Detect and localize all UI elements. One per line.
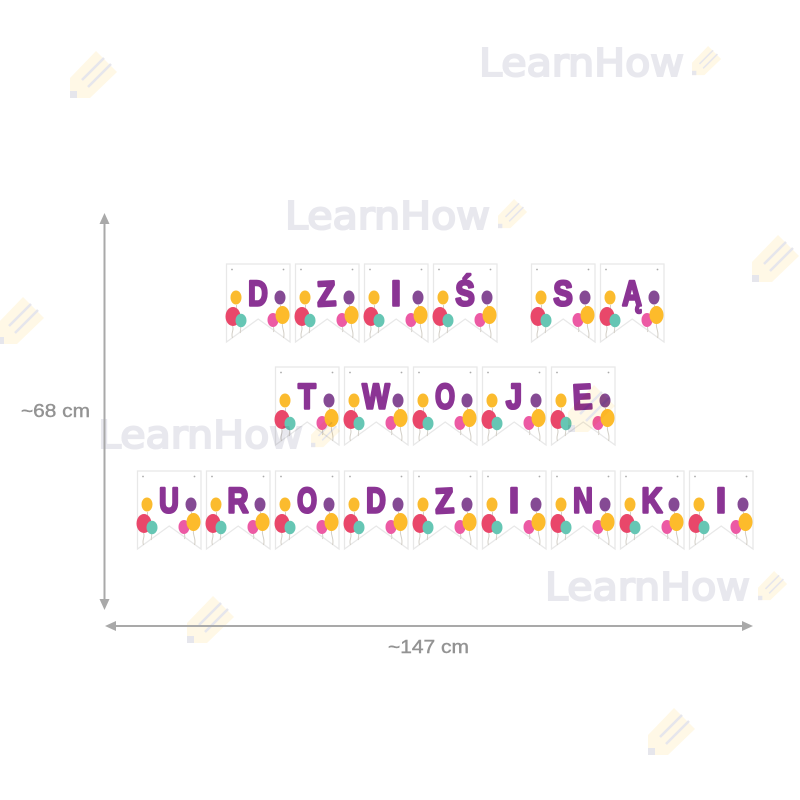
- flag letter I: I: [509, 482, 519, 521]
- flag row: DZIŚ SĄ: [226, 264, 664, 342]
- flag letter I: [482, 471, 546, 549]
- flag letter W: W: [362, 377, 390, 416]
- flag row: TWOJE: [274, 367, 615, 445]
- flag letter E: E: [572, 377, 593, 417]
- height label: ~68 cm: [21, 401, 90, 421]
- flag letter D: D: [248, 274, 268, 314]
- flag letter Ą: Ą: [622, 274, 642, 314]
- watermark: LearnHow top: LearnHow: [479, 41, 684, 85]
- flag letter J: [482, 367, 546, 445]
- flag letter I: I: [716, 482, 726, 521]
- flag letter D: [226, 264, 290, 342]
- icon: pencil bottom left: [187, 596, 234, 643]
- flag letter O: O: [435, 378, 455, 417]
- flag letter K: K: [642, 481, 662, 520]
- arrow: width: [105, 621, 753, 631]
- flag letter N: N: [573, 481, 593, 521]
- flag letter S: [530, 264, 595, 342]
- flag letter W: [344, 367, 408, 445]
- flag letter S: S: [553, 274, 573, 313]
- watermark: LearnHow lower right: LearnHow: [545, 565, 750, 609]
- flag letter D: D: [366, 481, 386, 521]
- icon: pencil on flag: [568, 385, 615, 432]
- flag letter I: [688, 471, 753, 549]
- flag letter I: [364, 264, 428, 342]
- flag letter D: [344, 471, 408, 549]
- watermark: LearnHow upper middle: LearnHow: [285, 194, 490, 238]
- flag letter J: J: [506, 377, 522, 416]
- flag row: URODZINKI: [136, 471, 753, 549]
- flag letter Z: [412, 471, 477, 549]
- flag letter I: I: [391, 275, 401, 314]
- flag letter Ś: [432, 264, 497, 342]
- flag letter O: [274, 471, 339, 549]
- flag letter Z: Z: [316, 273, 337, 314]
- arrow: height: [100, 213, 110, 610]
- flag letter R: R: [228, 481, 248, 520]
- flag letter U: [136, 471, 201, 549]
- flag letter R: [206, 471, 270, 549]
- flag letter Ą: [600, 264, 664, 342]
- flag letter N: [550, 471, 615, 549]
- icon: pencil bottom right: [648, 708, 695, 755]
- flag letter Z: [294, 264, 359, 342]
- flag letter Z: Z: [434, 480, 455, 521]
- flag letter T: T: [298, 377, 316, 416]
- icon: pencil left: [0, 297, 44, 344]
- flag letter T: [274, 367, 339, 445]
- width label: ~147 cm: [388, 637, 469, 657]
- flag letter O: O: [297, 482, 317, 521]
- flag letter K: [620, 471, 684, 549]
- flag letter Ś: Ś: [455, 274, 475, 313]
- watermark: LearnHow left: LearnHow: [98, 413, 303, 457]
- flag letter E: [550, 367, 615, 445]
- flag letter O: [412, 367, 477, 445]
- flag letter U: U: [159, 481, 179, 521]
- icon: pencil right: [752, 235, 799, 282]
- icon: pencil top left: [70, 51, 117, 98]
